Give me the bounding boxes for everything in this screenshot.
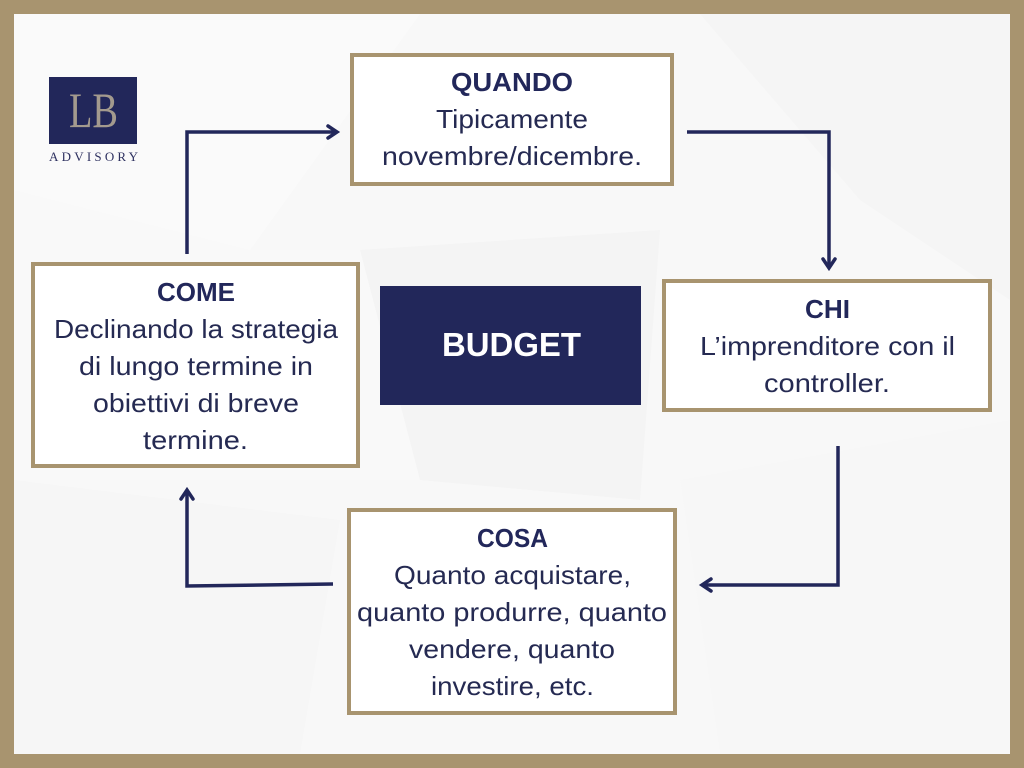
- panel: cosa: COSA: [477, 523, 548, 553]
- panel: budget centre: BUDGET: [442, 326, 581, 363]
- panel: cosa: investire, etc.: [431, 671, 594, 701]
- panel: cosa: Quanto acquistare,: [394, 560, 631, 590]
- panel: come: [33, 264, 358, 466]
- panel: cosa: quanto produrre, quanto: [357, 597, 667, 627]
- panel: come: di lungo termine in: [79, 351, 313, 381]
- panel: budget centre: [380, 286, 641, 405]
- panel: cosa: [349, 510, 675, 713]
- panel: quando: QUANDO: [451, 67, 573, 97]
- panel: cosa: vendere, quanto: [409, 634, 615, 664]
- logo: LB Advisory: [49, 77, 139, 164]
- panel: come: obiettivi di breve: [93, 388, 299, 418]
- arrow: cosa to come: [181, 490, 333, 586]
- panel: chi: L’imprenditore con il: [700, 331, 955, 361]
- arrow: quando to chi: [687, 132, 835, 268]
- panel: quando: [352, 55, 672, 184]
- panel: come: COME: [157, 277, 235, 307]
- logo: LB Advisory: LB: [69, 82, 118, 138]
- panel: chi: [664, 281, 990, 410]
- panel: quando: Tipicamente: [436, 104, 588, 134]
- panel: come: Declinando la strategia: [54, 314, 339, 344]
- panel: chi: controller.: [764, 368, 890, 398]
- arrow: chi to cosa: [702, 446, 838, 591]
- logo: LB Advisory: ADVISORY: [49, 149, 139, 164]
- panel: come: termine.: [143, 425, 248, 455]
- arrow: come to quando: [187, 126, 337, 254]
- panel: chi: CHI: [805, 294, 850, 324]
- panel: quando: novembre/dicembre.: [382, 141, 642, 171]
